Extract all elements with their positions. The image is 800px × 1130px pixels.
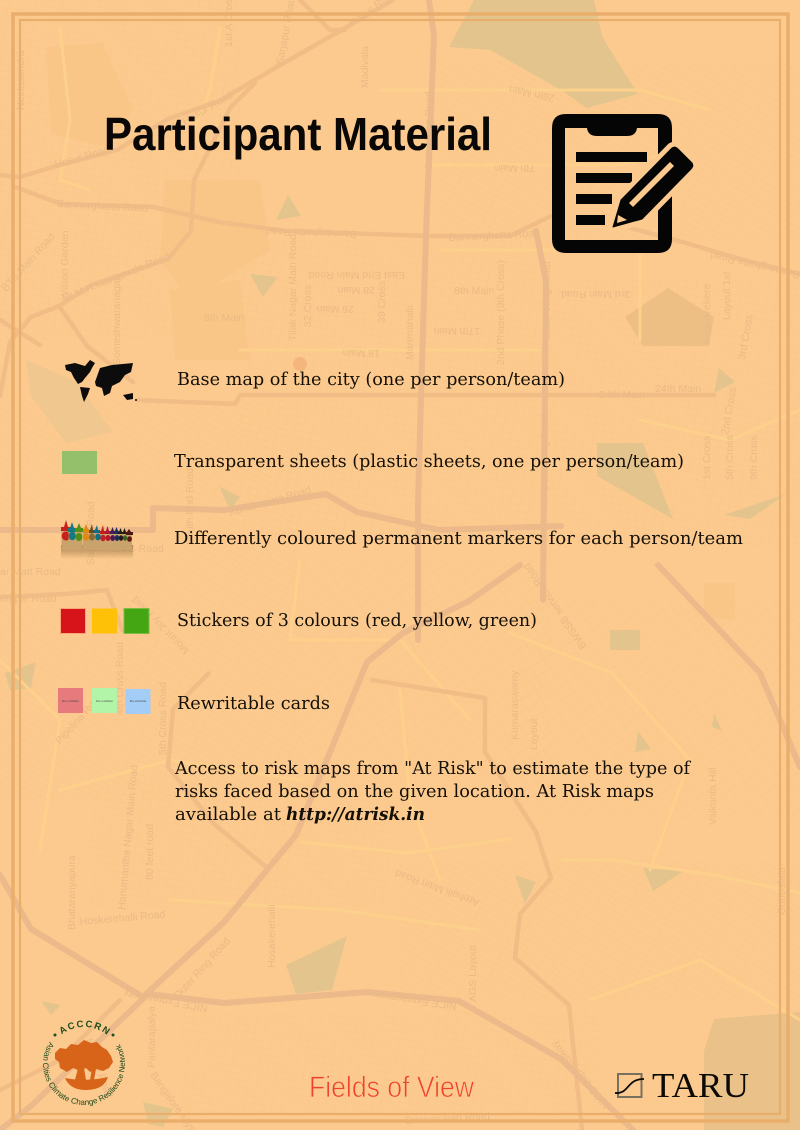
background street map: Bhataranyapura	[66, 855, 78, 930]
item: base map	[65, 360, 565, 402]
background street map: AGS Layout	[467, 945, 479, 1002]
background street map: 7th Main	[495, 162, 535, 174]
background street map: Hosur Road	[180, 89, 235, 128]
background street map: Outer Ring Road	[541, 261, 553, 340]
background street map: Hoskerehalli Road	[79, 909, 166, 928]
background street map: 26 Main	[316, 303, 354, 315]
background street map: NICE Expressway	[122, 987, 209, 1014]
background street map: 3rd Cross	[736, 314, 756, 361]
logo: Fields of View: Fields of View	[309, 1071, 474, 1104]
icon: three colour stickers	[60, 608, 149, 634]
label: Base map of the city (one per person/team)	[177, 369, 565, 390]
background street map: emple Road	[0, 593, 57, 605]
background street map: Mico Arekere	[701, 284, 713, 345]
background street map: Someshwaranagar	[111, 276, 123, 365]
icon: clipboard with pencil	[552, 114, 693, 253]
item: rewritable cards	[58, 688, 330, 714]
background street map: Marenahalli	[404, 306, 416, 360]
background street map: NICE Expressway	[371, 988, 457, 1012]
background street map: Hanumantha Nagar Main Road	[116, 764, 141, 910]
background street map: 2nd Phase (9th Cross)	[495, 260, 507, 365]
background street map: NICE Expressway	[548, 1038, 612, 1111]
background street map: 28 Main	[337, 284, 375, 296]
background street map: Pantarapalya	[146, 1006, 158, 1068]
logo: TARU	[615, 1066, 749, 1105]
background street map: 8th Main	[454, 285, 494, 297]
tree emblem	[55, 1040, 113, 1090]
title: Participant Material	[104, 108, 492, 160]
background street map: Bannerghatta Road	[449, 227, 540, 244]
background street map: Arehalli Main Road	[393, 867, 481, 908]
ring text: Asian Cities Climate Change Resilience Network	[42, 1042, 126, 1106]
background street map: South End Road	[184, 468, 196, 545]
background street map: Bannerghatta Road	[57, 198, 149, 215]
background street map: Gubbalala	[776, 867, 788, 915]
background street map: 4th Cross Road	[114, 642, 126, 715]
background street map: 17th Main	[434, 325, 480, 337]
item: stickers	[60, 608, 537, 634]
label: Rewritable cards	[177, 693, 330, 714]
background street map: Kanakapura Road	[228, 484, 312, 519]
text block: risk maps access	[174, 758, 691, 825]
background street map: Mount Joy Road	[129, 594, 192, 656]
background street map: Layout	[528, 718, 540, 750]
text block: risk maps access: available at	[175, 804, 282, 825]
background street map: 18 Main	[342, 347, 380, 359]
background street map: 8th Main	[204, 312, 244, 324]
label: Differently coloured permanent markers for each person/team	[174, 528, 743, 549]
item: permanent markers	[61, 520, 743, 559]
item: transparent sheets	[62, 451, 684, 474]
background street map: Outer Ring Road	[423, 91, 435, 170]
text block: risk maps access: Access to risk maps from "At Risk" to estimate the type of	[174, 758, 691, 779]
background street map: BTS Main Road	[0, 231, 58, 294]
background street map: Srinivasaiah Road	[405, 1111, 490, 1127]
background street map: 3rd Main Road	[561, 288, 630, 300]
background street map: 24th Main	[655, 383, 701, 395]
icon: three rewritable cards	[58, 688, 150, 714]
background street map: ar Matt Road	[0, 566, 61, 578]
icon: three rewritable cards: Re-writable	[96, 699, 113, 703]
background street map: 1st Cross	[701, 436, 713, 480]
background street map: Vaikunta Hill	[707, 767, 719, 825]
background street map: Dr.M.H.Marigowda Road	[61, 251, 172, 305]
background street map: Hosur Road	[54, 144, 111, 171]
background street map: 9th Cross	[748, 435, 760, 480]
icon: world map	[65, 360, 137, 402]
label: Transparent sheets (plastic sheets, one per person/team)	[174, 451, 684, 472]
background street map: Wilson Garden	[59, 230, 71, 300]
background street map: Mysore Road	[82, 1037, 115, 1100]
icon: three rewritable cards: Re-writable	[130, 699, 147, 703]
icon: three rewritable cards: Re-writable	[62, 699, 79, 703]
background street map: Outer Ring Road	[171, 935, 233, 1002]
background street map: Neelasandra	[15, 50, 27, 110]
background street map: 5th Cross	[724, 435, 736, 480]
background street map: 39 Cross	[376, 281, 388, 323]
background street map: Hosakerehalli	[266, 904, 278, 968]
icon: row of markers	[61, 520, 133, 559]
background street map: Tilak Nagar Main Road	[287, 234, 299, 341]
background street map: 2nd Cross	[719, 386, 739, 436]
icon: transparent green sheet	[62, 451, 97, 474]
background street map: Bannerghatta Road	[266, 225, 357, 240]
background street map: Bannerghatta Road	[709, 249, 800, 281]
background street map: 80 feet road	[144, 824, 156, 880]
background street map: Layout 1st	[721, 271, 733, 320]
background street map: Samaja Road	[85, 501, 97, 565]
background street map: 5th Cross Road	[157, 682, 169, 755]
ring text: ACCCRN	[60, 1020, 110, 1034]
background street map: DVG Road	[113, 543, 164, 555]
logo: ACCCRN	[42, 1020, 126, 1106]
text block: risk maps access: http://atrisk.in	[286, 804, 425, 825]
background street map: Kumaraswamy	[509, 670, 521, 740]
logo: TARU: TARU	[652, 1066, 749, 1105]
background street map: 32 Cross	[302, 285, 314, 327]
background street map: Pipeline Road	[53, 690, 106, 747]
background street map: BWSSB service Road	[521, 560, 589, 651]
background street map: 24th Main	[599, 389, 645, 401]
label: Stickers of 3 colours (red, yellow, green)	[177, 610, 537, 631]
background street map: Outer Ring Road	[539, 413, 551, 492]
background street map: East End Main Road	[309, 269, 405, 281]
background street map: 26th Main	[508, 82, 556, 104]
text block: risk maps access: risks faced based on the given location. At Risk maps	[175, 781, 654, 802]
background street map: Madivala	[359, 46, 371, 88]
